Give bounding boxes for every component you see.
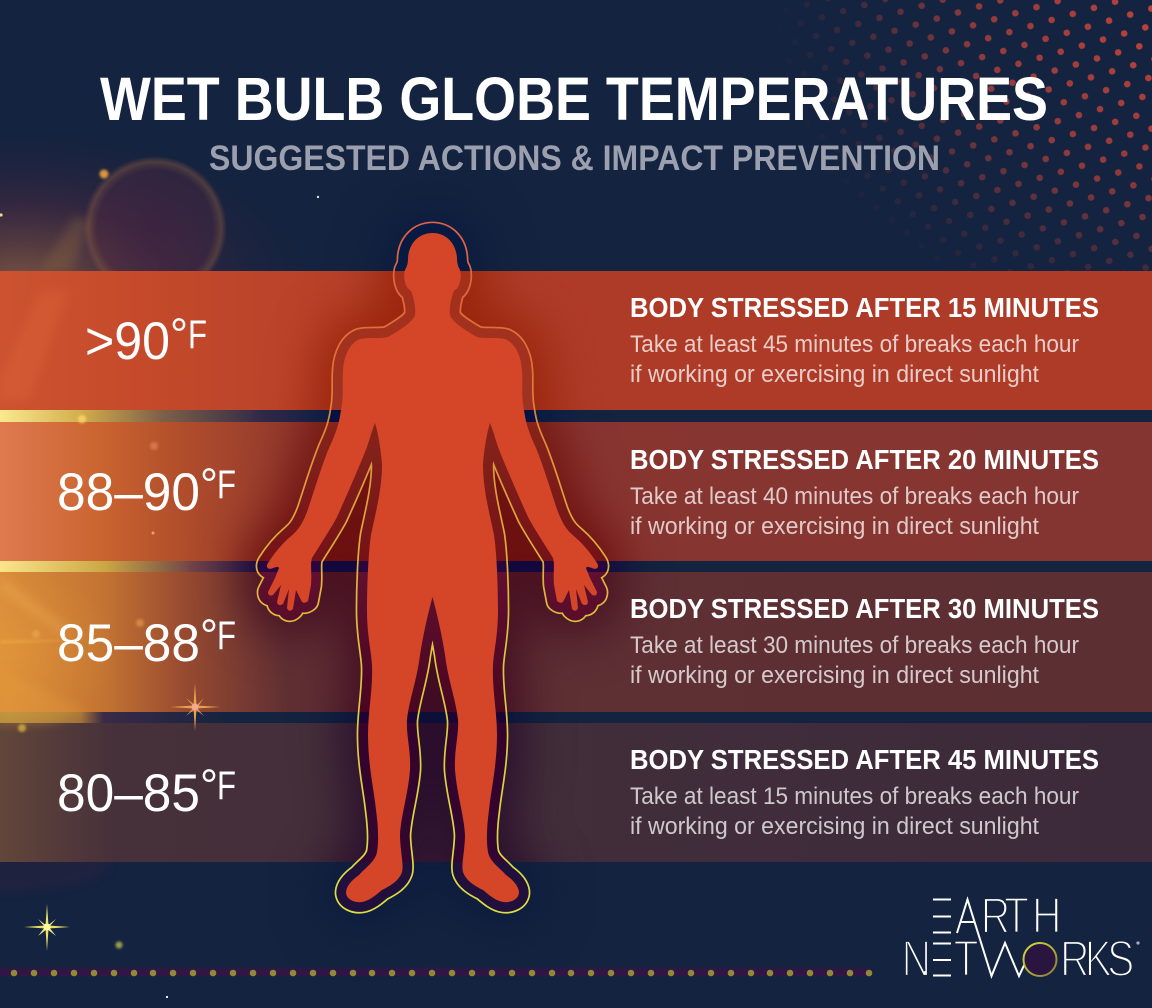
halftone dot field bbox=[792, 0, 1152, 271]
temperature label: over 90: >90 bbox=[85, 312, 170, 371]
heat halo bbox=[258, 271, 608, 912]
action text: 15 minutes: BODY STRESSED AFTER 15 MINUTES bbox=[630, 292, 1099, 323]
action text: 20 minutes: Take at least 40 minutes of breaks each hour bbox=[630, 483, 1079, 510]
temperature label: 80 to 85: 80–85 bbox=[57, 764, 200, 823]
action text: 20 minutes bbox=[630, 444, 1099, 540]
logo: Earth Networks: NETWORKS bbox=[902, 930, 1134, 987]
temperature label: 80 to 85: ° bbox=[200, 760, 218, 811]
action text: 30 minutes: Take at least 30 minutes of breaks each hour bbox=[630, 632, 1079, 659]
action text: 20 minutes: if working or exercising in direct sunlight bbox=[630, 513, 1039, 540]
heat glow bbox=[217, 271, 637, 862]
action text: 30 minutes: if working or exercising in direct sunlight bbox=[630, 662, 1039, 689]
action text: 45 minutes bbox=[630, 744, 1099, 840]
small sparkles bbox=[116, 942, 168, 998]
action text: 30 minutes: BODY STRESSED AFTER 30 MINUTES bbox=[630, 593, 1099, 624]
logo: Earth Networks bbox=[902, 887, 1140, 987]
logo: Earth Networks: EARTH bbox=[957, 887, 1061, 944]
dotted line bbox=[0, 968, 872, 976]
temperature label: 88 to 90: ° bbox=[200, 459, 218, 510]
temperature label: 85 to 88: 85–88 bbox=[57, 614, 200, 673]
temperature label: 85 to 88: ° bbox=[200, 610, 218, 661]
icon: orange star bbox=[170, 683, 220, 731]
action text: 45 minutes: BODY STRESSED AFTER 45 MINUTES bbox=[630, 744, 1099, 775]
temperature label: 80 to 85: F bbox=[217, 764, 236, 808]
action text: 45 minutes: if working or exercising in direct sunlight bbox=[630, 813, 1039, 840]
icon: yellow star bbox=[24, 904, 70, 951]
temperature label: over 90: ° bbox=[170, 309, 188, 360]
temperature bands bbox=[0, 271, 1152, 862]
temperature label: 85 to 88: F bbox=[217, 614, 236, 658]
human body silhouette bbox=[217, 222, 637, 914]
temperature label: over 90: F bbox=[188, 313, 207, 357]
action text: 20 minutes: BODY STRESSED AFTER 20 MINUTES bbox=[630, 444, 1099, 475]
action text: 15 minutes: Take at least 45 minutes of breaks each hour bbox=[630, 331, 1079, 358]
sun flare rays bbox=[0, 290, 158, 735]
lens flare circle bbox=[0, 156, 319, 300]
title: WET BULB GLOBE TEMPERATURES bbox=[100, 65, 1048, 133]
temperature label: 88 to 90: F bbox=[217, 463, 236, 507]
temperature label: 88 to 90: 88–90 bbox=[57, 463, 200, 522]
action text: 15 minutes: if working or exercising in direct sunlight bbox=[630, 361, 1039, 388]
action text: 15 minutes bbox=[630, 292, 1099, 388]
body fill bbox=[267, 233, 598, 902]
subtitle: SUGGESTED ACTIONS & IMPACT PREVENTION bbox=[209, 139, 940, 178]
action text: 30 minutes bbox=[630, 593, 1099, 689]
heat outline bbox=[256, 222, 610, 914]
action text: 45 minutes: Take at least 15 minutes of breaks each hour bbox=[630, 783, 1079, 810]
